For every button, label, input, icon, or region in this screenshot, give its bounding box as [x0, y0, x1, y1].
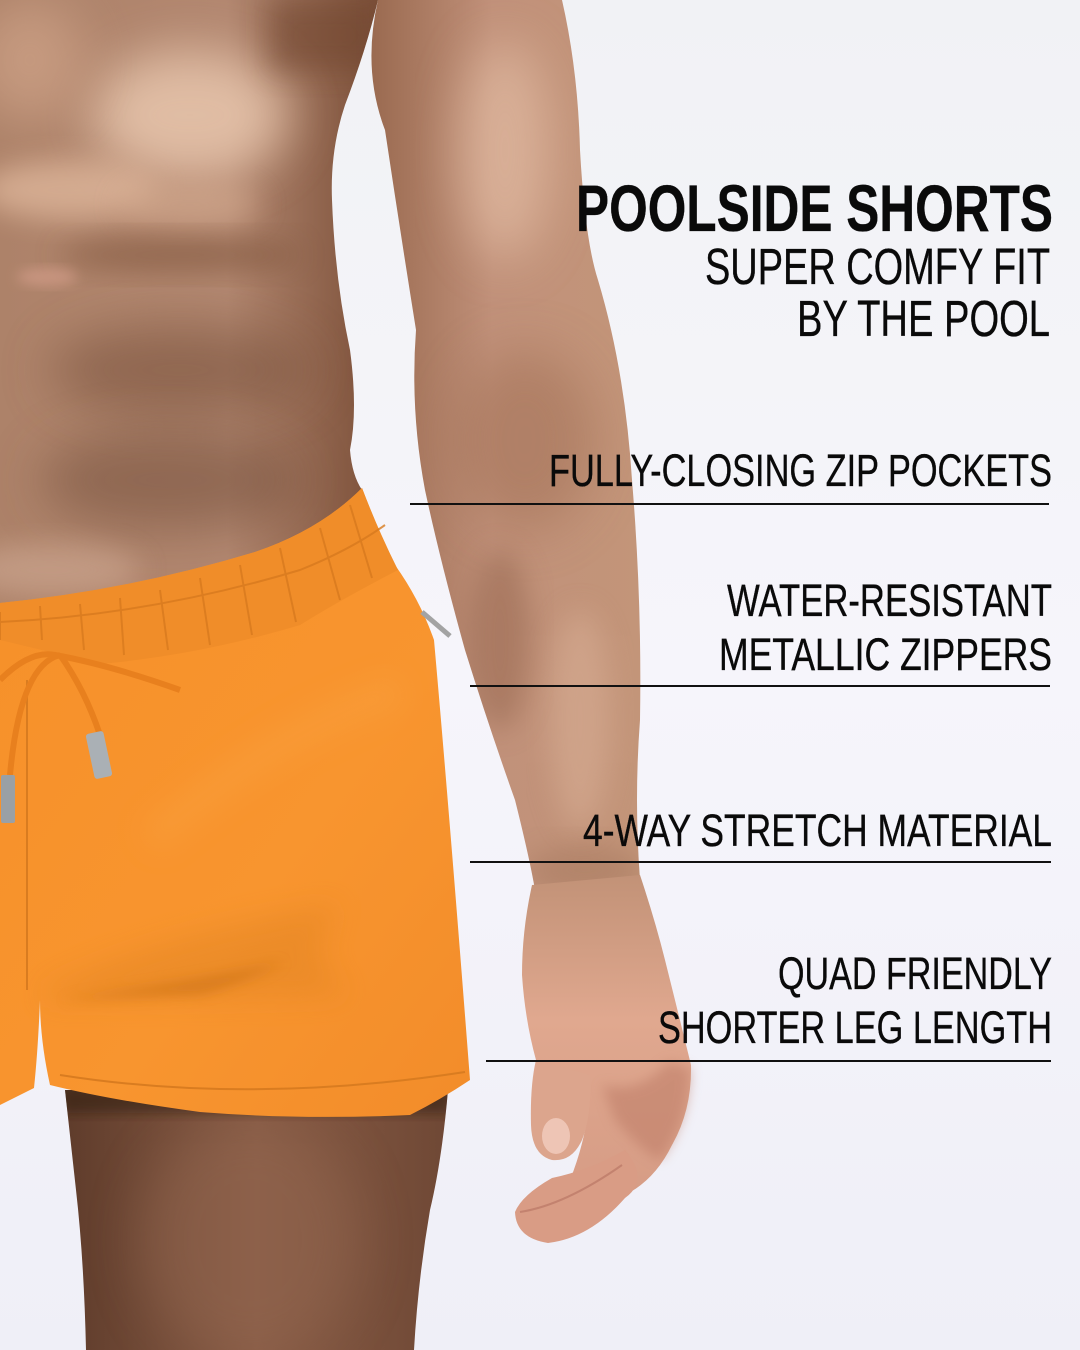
- photo: orange shorts: [0, 488, 470, 1117]
- navel: [17, 268, 77, 286]
- photo: leg: [60, 1085, 450, 1350]
- feature: leg length: [486, 948, 1052, 1062]
- palm: [522, 875, 691, 1196]
- drawstring: [0, 654, 180, 775]
- photo: hand: [515, 875, 691, 1243]
- shorts shading: [45, 905, 350, 1000]
- photo: torso: [0, 0, 380, 620]
- shorts waistband: [0, 488, 398, 664]
- drawstring metal tips: [85, 731, 113, 779]
- photo: arm: [371, 0, 645, 894]
- pocket zipper: [422, 612, 450, 636]
- fingers: [515, 1150, 638, 1243]
- waistband gathers: [0, 505, 385, 655]
- thumb: [531, 1060, 590, 1160]
- thumb nail: [542, 1118, 570, 1154]
- feature: metallic zippers: [470, 575, 1052, 687]
- subtitle: [705, 238, 1050, 347]
